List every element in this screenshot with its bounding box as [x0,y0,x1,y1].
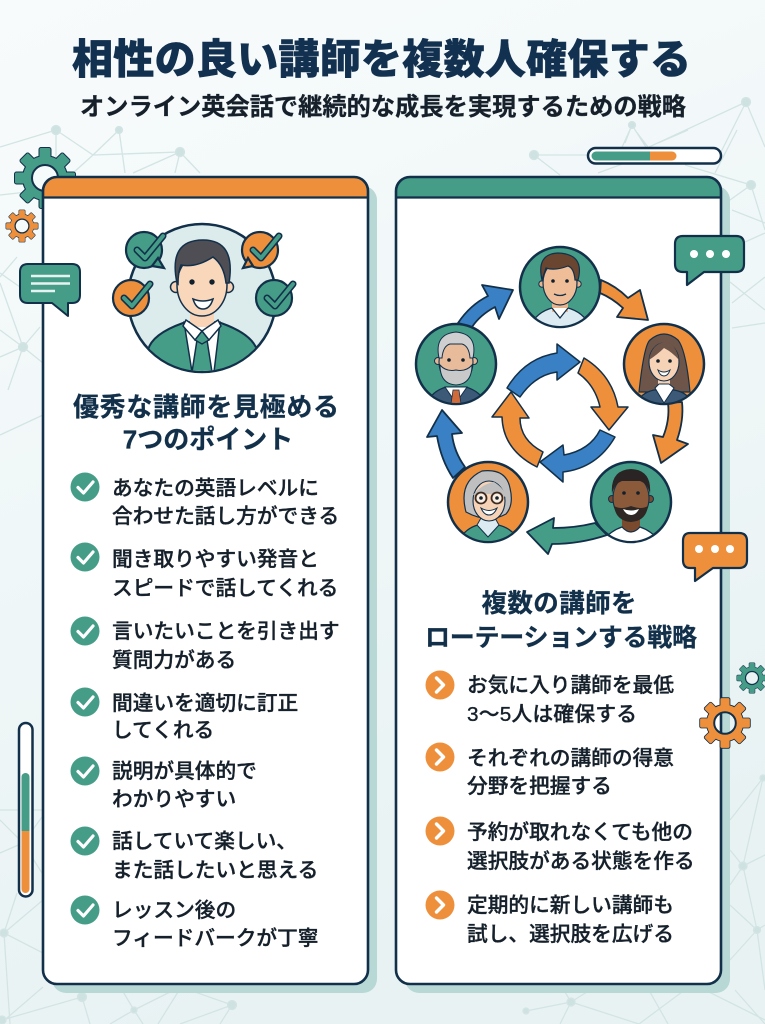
strategy 2 [426,742,674,798]
item 6 [70,826,318,882]
item 2: 聞き取りやすい発音と [112,548,319,571]
item 3 [70,616,340,672]
inner cycle arrows [492,344,628,482]
avatar: older man with beard [416,324,496,405]
avatar: older woman with glasses [448,462,528,545]
icon: teal speech bubble with dots [675,236,744,285]
progress bar: vertical [19,723,32,896]
item 4: してくれる [112,719,214,742]
item 1: あなたの英語レベルに [112,477,319,500]
strategy 3: 選択肢がある状態を作る [467,850,695,873]
icon: large orange gear [700,698,750,748]
item 7: フィードバークが丁寧 [112,927,318,950]
strategy list [426,670,695,946]
strategy 2: 分野を把握する [467,775,612,798]
panel shadows [52,186,730,993]
heading: seven points: 優秀な講師を見極める [73,392,339,422]
avatar: woman with long hair [624,324,704,405]
strategy 3: 予約が取れなくても他の [467,821,693,844]
strategy 1: お気に入り講師を最低 [467,674,674,697]
item 4: 間違いを適切に訂正 [112,692,298,715]
icon: large teal gear [15,148,75,208]
strategy 4: 定期的に新しい講師も [467,894,674,917]
item 6: また話したいと思える [112,859,318,882]
strategy 1 [426,670,674,726]
panel: rotation strategy [396,177,721,984]
strategy 2: それぞれの講師の得意 [467,747,674,770]
item 1 [70,472,339,528]
avatar: man with dark skin and beard [591,462,671,546]
strategy 1: 3〜5人は確保する [467,703,637,726]
panel header: teal [396,177,721,197]
strategy 3 [426,816,695,873]
panel header: orange [43,177,368,197]
checklist [70,472,340,950]
icon: small teal gear [737,663,765,693]
icon: orange speech bubble with dots [683,533,747,581]
title: 相性の良い講師を複数人確保する [72,36,691,82]
item 1: 合わせた話し方ができる [112,505,339,528]
item 7 [70,896,318,950]
heading line two: ローテーションする戦略 [425,624,697,652]
panel: excellent teachers [43,177,368,984]
item 2: スピードで話してくれる [112,577,338,600]
item 3: 質問力がある [112,649,236,672]
diagram: teacher rotation cycle [416,247,704,554]
outer arrows [427,280,688,554]
heading: rotation strategy: 複数の講師を [482,590,636,618]
icon: small orange gear [6,210,38,242]
avatar: young man [520,247,600,330]
icon: green speech bubble with lines [20,264,80,316]
item 5: 説明が具体的で [112,760,257,783]
strategy 4 [426,890,674,946]
illustration: teacher with checkmarks [113,224,293,375]
strategy 4: 試し、選択肢を広げる [467,923,674,946]
progress bar: horizontal [588,148,721,164]
item 3: 言いたいことを引き出す [112,620,340,643]
item 7: レッスン後の [112,899,236,922]
subtitle: オンライン英会話で継続的な成長を実現するための戦略 [80,94,687,121]
item 6: 話していて楽しい、 [112,830,297,853]
item 5: わかりやすい [112,788,236,811]
heading line two: 7つのポイント [123,424,293,454]
item 5 [70,756,257,811]
item 4 [70,688,298,742]
item 2 [70,542,338,600]
